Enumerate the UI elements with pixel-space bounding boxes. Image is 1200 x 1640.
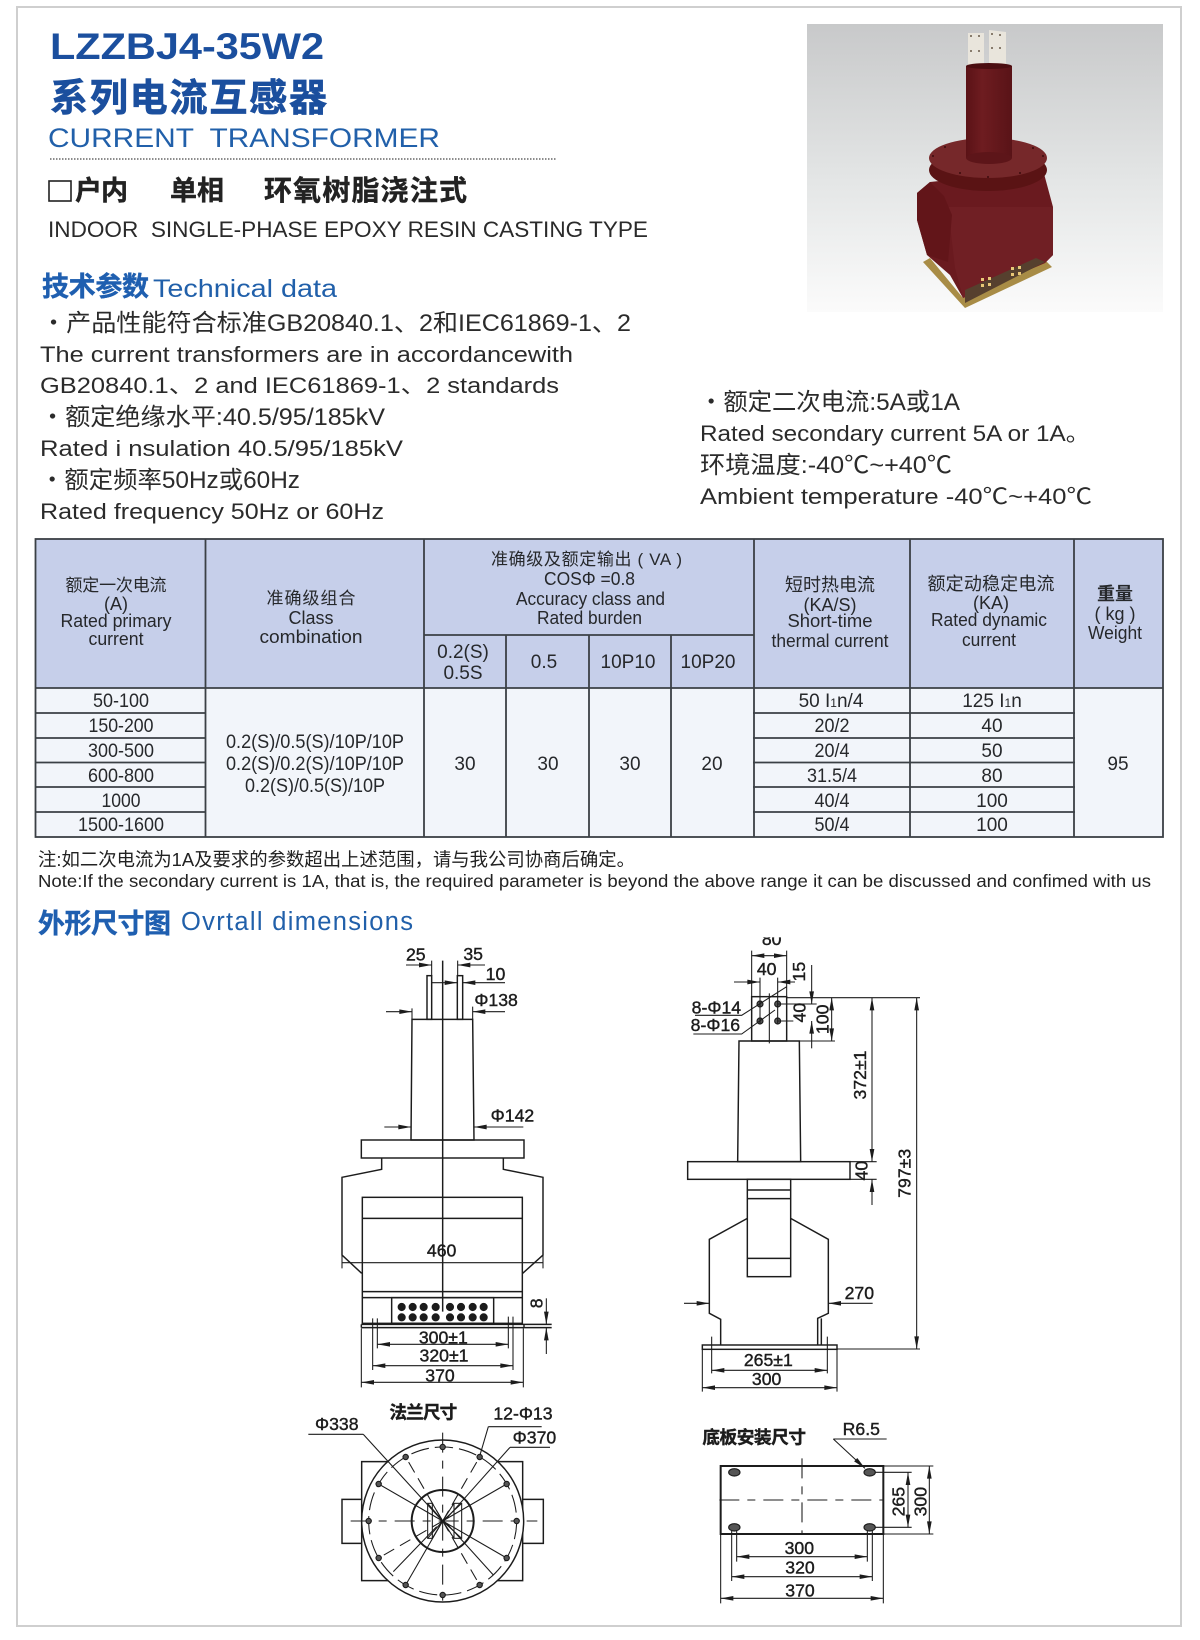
technical data left text block: Rated i nsulation 40.5/95/185kV bbox=[40, 436, 403, 461]
column: primary current values: 150-200 bbox=[88, 716, 154, 737]
column: thermal current values: 31.5/4 bbox=[807, 766, 857, 787]
title block bbox=[48, 26, 556, 159]
drawing: flange dimensions: 法兰尺寸 bbox=[389, 1402, 457, 1422]
drawing: base plate mounting dimensions: 265 bbox=[889, 1487, 909, 1516]
overall dimensions heading bbox=[38, 908, 413, 939]
header: short-time thermal current: Short-time bbox=[788, 611, 872, 631]
drawing: front elevation: 8 bbox=[527, 1298, 547, 1308]
technical data heading: 技术参数 bbox=[42, 272, 149, 302]
header: weight: Weight bbox=[1088, 623, 1142, 643]
column: thermal current values: 50 I1n/4 bbox=[799, 691, 864, 712]
header: short-time thermal current: 短时热电流 bbox=[785, 575, 875, 595]
title block: CURRENT TRANSFORMER bbox=[48, 123, 440, 153]
overall dimensions heading: Ovrtall dimensions bbox=[181, 908, 413, 936]
header: rated primary current: current bbox=[88, 629, 144, 649]
technical data right text block: Rated secondary current 5A or 1A。 bbox=[700, 421, 1090, 446]
drawing: side elevation: 40 bbox=[757, 959, 777, 979]
column: primary current values: 50-100 bbox=[93, 691, 149, 712]
header: rated dynamic current: Rated dynamic bbox=[931, 610, 1047, 630]
header: weight: 重量 bbox=[1097, 584, 1133, 604]
header: accuracy class and rated burden: 0.2(S) bbox=[437, 642, 489, 663]
table note bbox=[38, 849, 1151, 891]
title block: LZZBJ4-35W2 bbox=[50, 26, 324, 67]
drawing: side elevation: 15 bbox=[789, 962, 809, 981]
column: dynamic current values: 100 bbox=[976, 815, 1008, 836]
column: burden values: 20 bbox=[701, 754, 723, 775]
drawing: flange dimensions bbox=[308, 1402, 556, 1607]
column: class combinations: 0.2(S)/0.5(S)/10P bbox=[245, 776, 385, 797]
column: burden values bbox=[454, 754, 723, 775]
column: thermal current values: 20/4 bbox=[814, 741, 850, 762]
drawing: base plate mounting dimensions: R6.5 bbox=[843, 1419, 880, 1439]
header: accuracy class and rated burden: 0.5S bbox=[443, 663, 483, 684]
table note: 注:如二次电流为1A及要求的参数超出上述范围，请与我公司协商后确定。 bbox=[38, 849, 635, 870]
drawing: front elevation: 320±1 bbox=[420, 1346, 468, 1366]
column: dynamic current values: 125 I1n bbox=[962, 691, 1022, 712]
drawing: side elevation: 8-Φ16 bbox=[691, 1015, 740, 1035]
table note: Note:If the secondary current is 1A, that is, the required parameter is beyond the above range it can be discussed and confimed with us bbox=[38, 871, 1151, 891]
column: thermal current values: 40/4 bbox=[814, 791, 850, 812]
drawing: side elevation: 270 bbox=[845, 1283, 874, 1303]
technical data heading: Technical data bbox=[153, 275, 337, 303]
column: thermal current values: 20/2 bbox=[814, 716, 850, 737]
column: primary current values: 300-500 bbox=[88, 741, 154, 762]
header: weight bbox=[1088, 584, 1142, 643]
product type heading: INDOOR SINGLE-PHASE EPOXY RESIN CASTING TYPE bbox=[48, 217, 648, 242]
column: class combinations: 0.2(S)/0.2(S)/10P/10P bbox=[226, 754, 404, 775]
drawing: base plate mounting dimensions: 320 bbox=[785, 1557, 815, 1577]
technical data right text block: Ambient temperature -40℃~+40℃ bbox=[700, 484, 1092, 509]
drawing: flange dimensions: Φ338 bbox=[315, 1414, 359, 1434]
drawing: base plate mounting dimensions: 底板安装尺寸 bbox=[702, 1426, 806, 1447]
column: dynamic current values: 100 bbox=[976, 791, 1008, 812]
header: accuracy class and rated burden: 10P10 bbox=[601, 652, 655, 673]
technical data left text block bbox=[40, 310, 631, 524]
header: weight: ( kg ) bbox=[1094, 604, 1136, 624]
header: rated primary current: Rated primary bbox=[60, 611, 172, 631]
column: primary current values: 600-800 bbox=[88, 766, 154, 787]
technical data heading bbox=[42, 272, 337, 303]
technical data right text block: 环境温度:-40℃~+40℃ bbox=[700, 452, 952, 479]
drawing: side elevation: 372±1 bbox=[850, 1051, 870, 1099]
header: rated primary current bbox=[60, 576, 172, 649]
header: rated primary current: 额定一次电流 bbox=[66, 576, 166, 595]
header: accuracy class and rated burden: 准确级及额定输出 ( VA ) bbox=[491, 550, 682, 569]
technical data left text block: ・额定绝缘水平:40.5/95/185kV bbox=[40, 404, 385, 431]
drawing: flange dimensions: Φ370 bbox=[513, 1427, 556, 1447]
drawing: front elevation: 370 bbox=[425, 1366, 455, 1386]
column: class combinations bbox=[226, 732, 404, 797]
technical data left text block: GB20840.1、2 and IEC61869-1、2 standards bbox=[40, 373, 559, 398]
header: class combination bbox=[260, 589, 362, 647]
column: dynamic current values bbox=[962, 691, 1022, 836]
drawing: front elevation: 460 bbox=[427, 1241, 457, 1261]
technical data left text block: ・产品性能符合标准GB20840.1、2和IEC61869-1、2 bbox=[41, 310, 631, 337]
technical data right text block: ・额定二次电流:5A或1A bbox=[699, 389, 960, 416]
header: accuracy class and rated burden: 10P20 bbox=[681, 652, 735, 673]
column: primary current values: 1000 bbox=[102, 791, 140, 812]
drawing: side elevation: 40 bbox=[851, 1161, 871, 1180]
drawing: side elevation: 80 bbox=[762, 929, 782, 949]
header: short-time thermal current: thermal current bbox=[772, 631, 888, 651]
header: short-time thermal current: (KA/S) bbox=[803, 595, 857, 615]
drawing: side elevation: 100 bbox=[812, 1004, 832, 1034]
column: burden values: 30 bbox=[619, 754, 641, 775]
header: rated dynamic current bbox=[928, 574, 1054, 650]
product photo bbox=[807, 24, 1163, 312]
column: primary current values bbox=[78, 691, 164, 836]
technical data left text block: Rated frequency 50Hz or 60Hz bbox=[40, 499, 384, 524]
drawing: front elevation: 35 bbox=[463, 944, 483, 964]
drawing: front elevation bbox=[342, 944, 552, 1387]
column: weight value: 95 bbox=[1107, 754, 1129, 775]
title block: 系列电流互感器 bbox=[50, 78, 327, 120]
column: dynamic current values: 50 bbox=[981, 741, 1003, 762]
drawing: side elevation: 300 bbox=[752, 1369, 782, 1389]
column: thermal current values bbox=[799, 691, 864, 836]
column: thermal current values: 50/4 bbox=[814, 815, 850, 836]
drawing: base plate mounting dimensions: 300 bbox=[785, 1538, 814, 1558]
column: class combinations: 0.2(S)/0.5(S)/10P/10P bbox=[226, 732, 404, 753]
technical data left text block: The current transformers are in accordancewith bbox=[40, 342, 573, 367]
header: class combination: Class bbox=[288, 608, 334, 628]
header: accuracy class and rated burden bbox=[437, 550, 735, 684]
drawing: side elevation: 8-Φ14 bbox=[692, 997, 741, 1017]
column: primary current values: 1500-1600 bbox=[78, 815, 164, 836]
specification table bbox=[35, 539, 1163, 837]
product type heading: 环氧树脂浇注式 bbox=[264, 175, 467, 206]
drawing: flange dimensions: 12-Φ13 bbox=[493, 1403, 553, 1423]
drawing: base plate mounting dimensions: 300 bbox=[911, 1487, 931, 1516]
column: burden values: 30 bbox=[537, 754, 559, 775]
drawing: base plate mounting dimensions bbox=[702, 1419, 933, 1603]
header: rated dynamic current: current bbox=[962, 630, 1016, 650]
header: accuracy class and rated burden: 0.5 bbox=[531, 652, 557, 673]
drawing: front elevation: 300±1 bbox=[419, 1327, 468, 1347]
header: class combination: combination bbox=[260, 627, 362, 647]
drawing: side elevation: 265±1 bbox=[744, 1350, 793, 1370]
product type heading: 单相 bbox=[170, 176, 224, 206]
header: rated primary current: (A) bbox=[104, 594, 128, 614]
column: dynamic current values: 40 bbox=[981, 716, 1003, 737]
product type heading bbox=[48, 175, 648, 242]
column: dynamic current values: 80 bbox=[981, 766, 1003, 787]
technical data right text block bbox=[699, 389, 1092, 509]
drawing: front elevation: 25 bbox=[406, 945, 426, 965]
drawing: side elevation bbox=[684, 927, 920, 1392]
header: rated dynamic current: (KA) bbox=[973, 593, 1009, 613]
header: short-time thermal current bbox=[772, 575, 888, 651]
column: burden values: 30 bbox=[454, 754, 476, 775]
drawing: front elevation: Φ142 bbox=[491, 1106, 534, 1126]
drawing: front elevation: 10 bbox=[486, 964, 505, 984]
product type heading: 户内 bbox=[75, 176, 128, 206]
drawing: front elevation: Φ138 bbox=[474, 990, 518, 1010]
header: rated dynamic current: 额定动稳定电流 bbox=[928, 574, 1054, 594]
drawing: base plate mounting dimensions: 370 bbox=[785, 1581, 815, 1601]
header: class combination: 准确级组合 bbox=[266, 589, 356, 608]
header: accuracy class and rated burden: COSΦ =0.8 bbox=[544, 569, 635, 589]
technical data left text block: ・额定频率50Hz或60Hz bbox=[40, 467, 300, 494]
overall dimensions heading: 外形尺寸图 bbox=[38, 909, 171, 939]
header: accuracy class and rated burden: Accuracy class and bbox=[516, 589, 665, 609]
drawing: side elevation: 797±3 bbox=[895, 1149, 915, 1198]
drawing: side elevation: 40 bbox=[789, 1003, 809, 1022]
header: accuracy class and rated burden: Rated burden bbox=[537, 608, 642, 628]
